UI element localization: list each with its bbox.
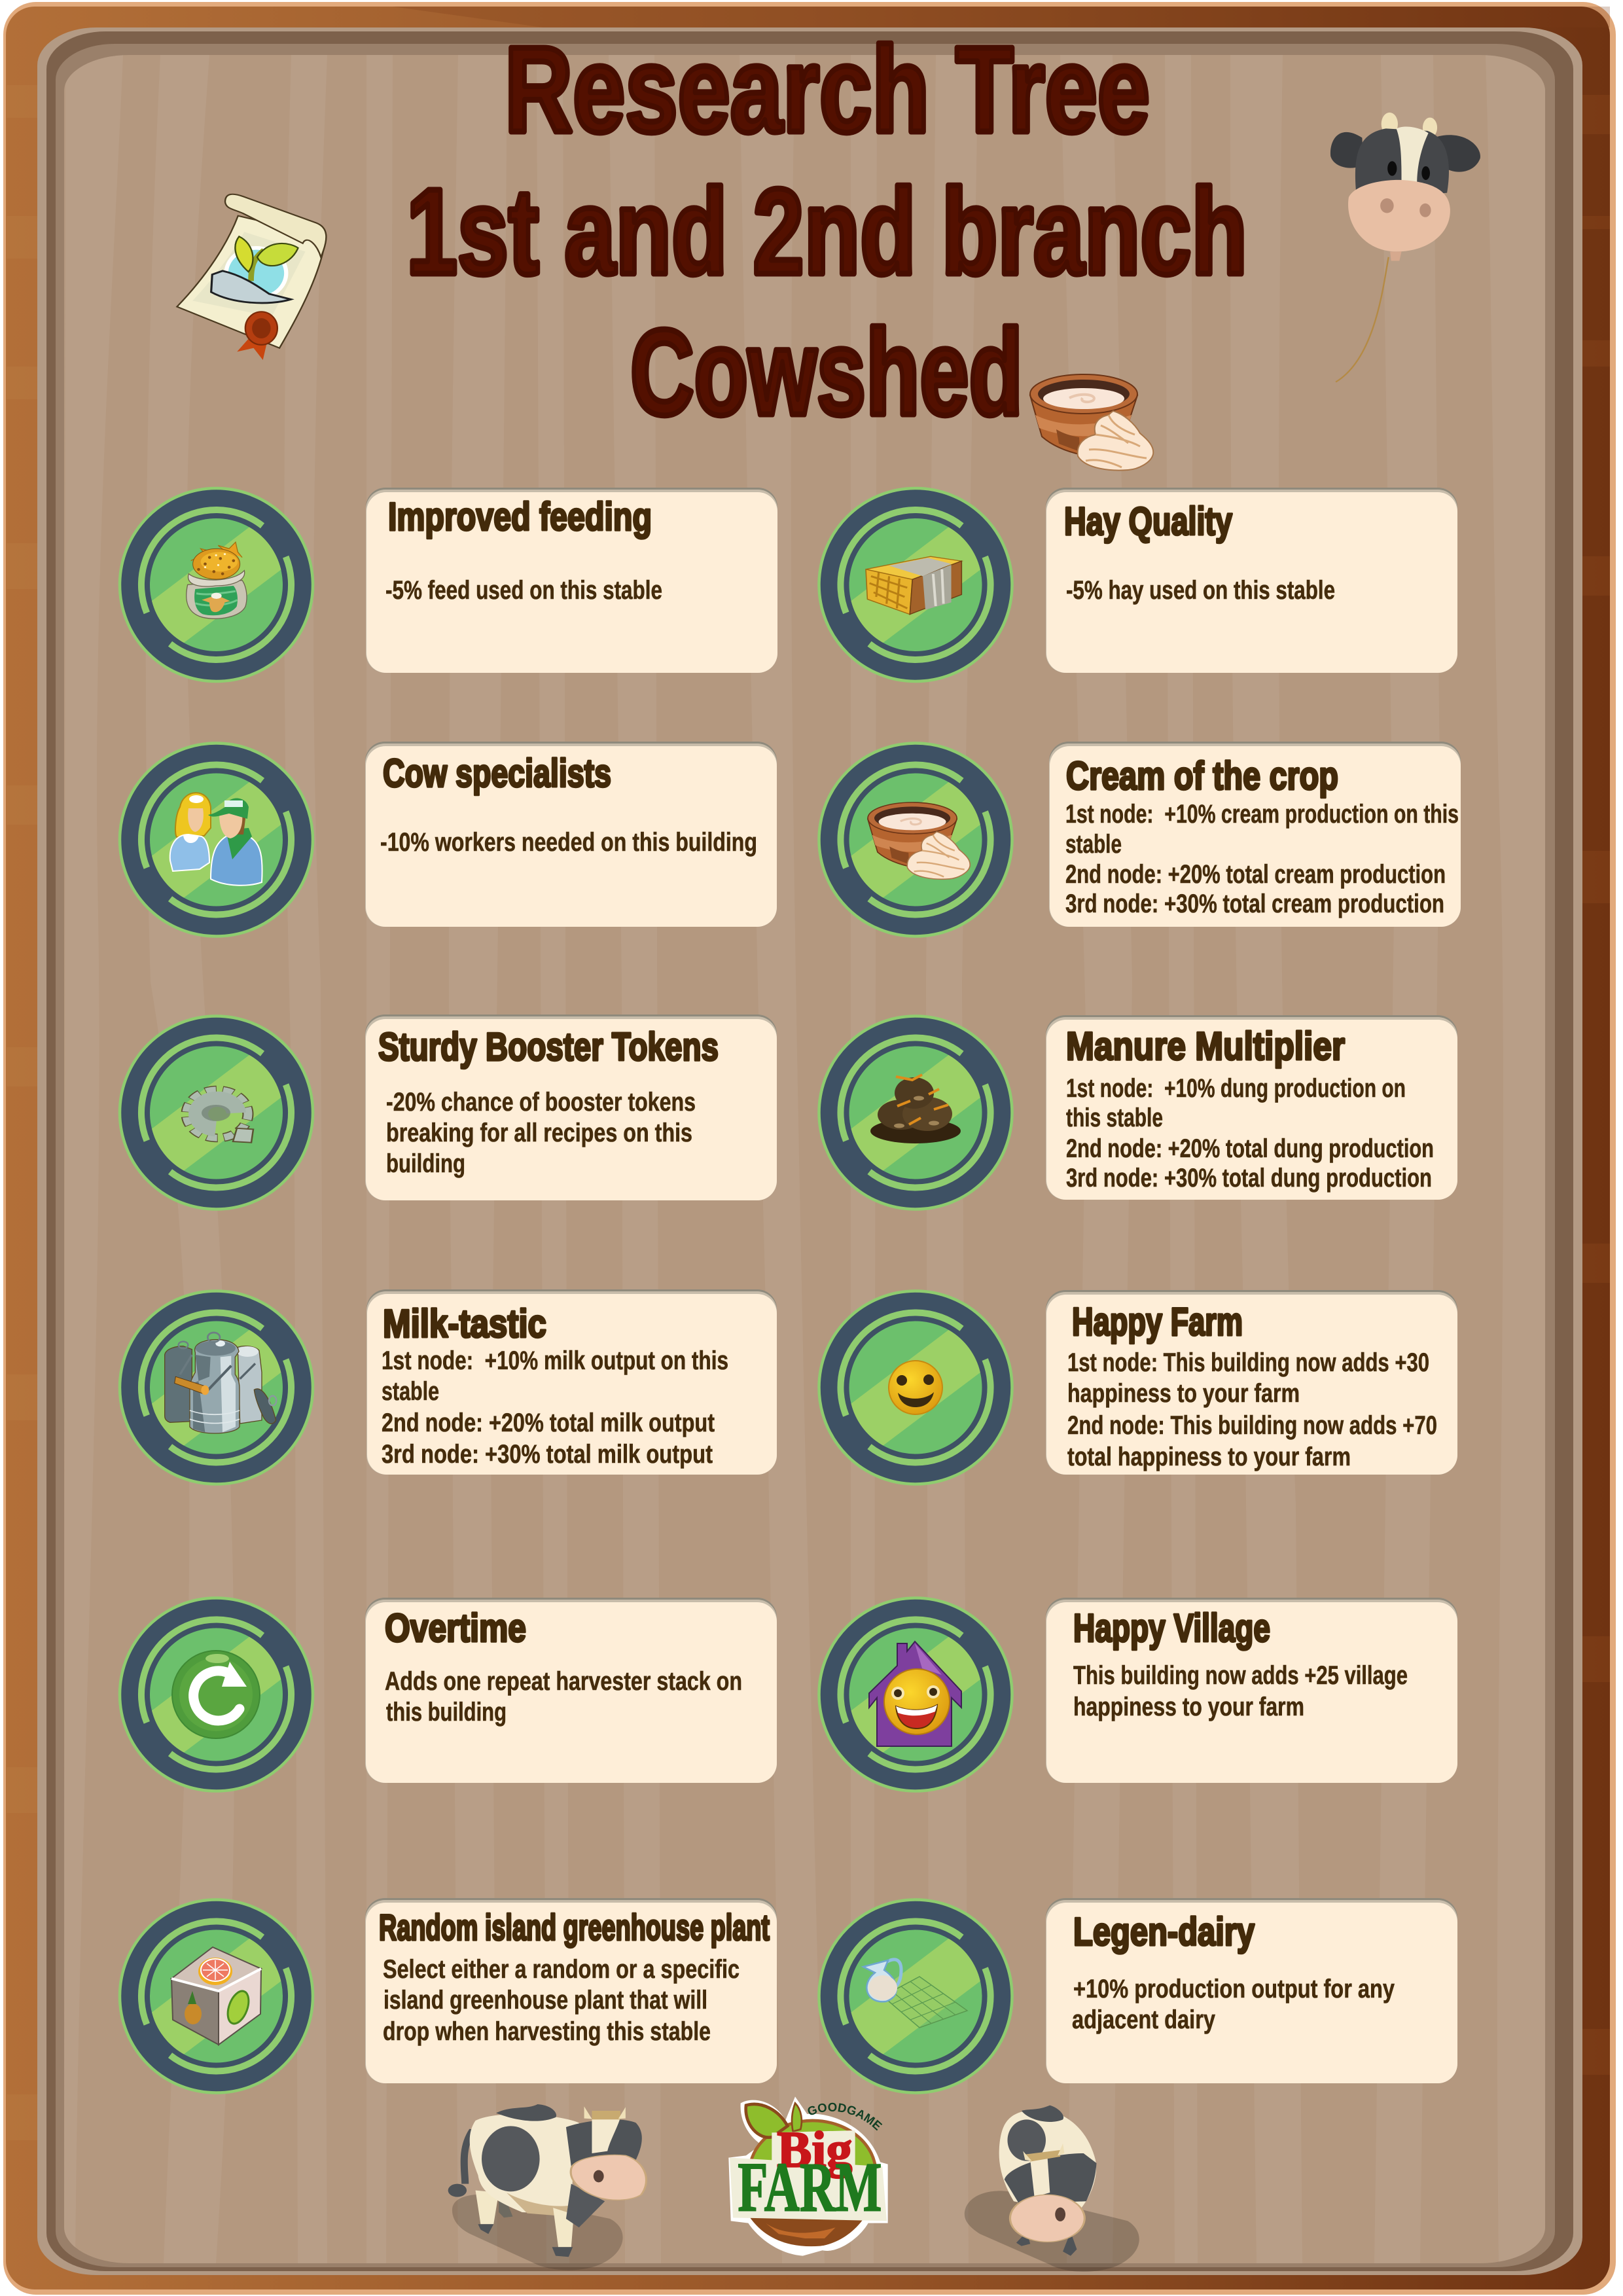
node card: Hay Quality: -5% hay used on this stable: [1066, 576, 1335, 605]
node card: Cow specialists: [365, 742, 777, 927]
node card: Cream of the crop: stable: [1065, 830, 1122, 859]
node card: Manure Multiplier: 3rd node: +30% total dung production: [1066, 1164, 1432, 1193]
node card: Cream of the crop: 1st node: +10% cream production on this: [1065, 800, 1459, 829]
node icon: Manure Multiplier: [819, 1016, 1012, 1210]
node card: Random island greenhouse plant: Random island greenhouse plant: [379, 1907, 770, 1948]
node card: Improved feeding: -5% feed used on this stable: [385, 576, 662, 605]
node icon: Overtime: [120, 1598, 313, 1791]
illustration: Big Farm logo: Big: [777, 2121, 852, 2178]
node card: Random island greenhouse plant: Select either a random or a specific: [383, 1955, 740, 1984]
node card: Happy Farm: total happiness to your farm: [1067, 1443, 1351, 1471]
node card: Legen-dairy: +10% production output for any: [1073, 1975, 1395, 2003]
node card: Happy Village: happiness to your farm: [1073, 1693, 1304, 1721]
node card: Manure Multiplier: this stable: [1066, 1103, 1163, 1132]
title: 1st and 2nd branch: [406, 164, 1247, 300]
node card: Legen-dairy: Legen-dairy: [1073, 1910, 1255, 1954]
node card: Cream of the crop: [1049, 742, 1461, 927]
node card: Improved feeding: Improved feeding: [388, 495, 652, 539]
illustration: cow left: [448, 2104, 646, 2270]
node card: Sturdy Booster Tokens: building: [386, 1149, 465, 1178]
illustration: Big Farm logo: FARM: [738, 2149, 882, 2226]
node card: Cow specialists: -10% workers needed on this building: [380, 828, 757, 857]
node card: Manure Multiplier: 1st node: +10% dung production on: [1066, 1074, 1406, 1103]
node card: Happy Village: [1046, 1598, 1457, 1783]
node card: Happy Farm: Happy Farm: [1072, 1300, 1243, 1344]
node card: Happy Farm: 2nd node: This building now adds +70: [1067, 1411, 1437, 1440]
node card: Legen-dairy: [1046, 1898, 1457, 2083]
node card: Sturdy Booster Tokens: breaking for all recipes on this: [386, 1119, 692, 1147]
node card: Milk-tastic: 2nd node: +20% total milk output: [382, 1408, 715, 1437]
node card: Overtime: [365, 1598, 777, 1783]
node icon: Sturdy Booster Tokens: [120, 1016, 313, 1210]
node card: Cow specialists: Cow specialists: [383, 751, 611, 795]
node card: Sturdy Booster Tokens: -20% chance of booster tokens: [386, 1088, 696, 1117]
node card: Milk-tastic: 1st node: +10% milk output on this: [382, 1346, 728, 1375]
node card: Milk-tastic: 3rd node: +30% total milk output: [382, 1440, 713, 1469]
node icon: Cow specialists: [120, 744, 313, 936]
node icon: Happy Farm: [819, 1291, 1012, 1484]
node card: Manure Multiplier: Manure Multiplier: [1066, 1024, 1345, 1068]
node card: Hay Quality: [1046, 488, 1457, 673]
illustration: cow right: [965, 2106, 1139, 2272]
node card: Happy Farm: [1046, 1290, 1457, 1475]
icon: cream bowl: [1030, 374, 1153, 471]
node icon: Cream of the crop: [819, 744, 1012, 936]
title: [406, 22, 1247, 440]
node card: Overtime: Overtime: [385, 1606, 526, 1650]
illustration: Big Farm logo: GOODGAME: [808, 2102, 882, 2131]
icon: cow balloon: [1330, 113, 1480, 382]
node card: Overtime: Adds one repeat harvester stack on: [385, 1667, 742, 1696]
node card: Happy Farm: happiness to your farm: [1067, 1379, 1300, 1408]
node card: Cream of the crop: Cream of the crop: [1066, 754, 1338, 798]
node card: Overtime: this building: [386, 1698, 507, 1727]
node card: Manure Multiplier: [1046, 1015, 1457, 1200]
node icon: Improved feeding: [120, 488, 313, 681]
node card: Cream of the crop: 2nd node: +20% total cream production: [1065, 860, 1446, 889]
node card: Happy Farm: 1st node: This building now adds +30: [1067, 1348, 1429, 1377]
node card: Sturdy Booster Tokens: [365, 1014, 777, 1200]
node card: Milk-tastic: [366, 1289, 777, 1475]
title: Research Tree: [505, 22, 1150, 158]
node card: Random island greenhouse plant: [365, 1898, 777, 2083]
node icon: Legen-dairy: [819, 1899, 1012, 2093]
title: Cowshed: [630, 305, 1023, 440]
node icon: Hay Quality: [819, 488, 1012, 681]
node icon: Milk-tastic: [120, 1291, 313, 1484]
node card: Happy Village: Happy Village: [1073, 1606, 1270, 1650]
node card: Random island greenhouse plant: island greenhouse plant that will: [383, 1986, 707, 2015]
node icon: Happy Village: [819, 1598, 1012, 1791]
node card: Hay Quality: Hay Quality: [1064, 499, 1232, 543]
node card: Milk-tastic: Milk-tastic: [383, 1302, 546, 1346]
node card: Improved feeding: [366, 488, 777, 673]
node card: Legen-dairy: adjacent dairy: [1072, 2005, 1216, 2034]
node card: Milk-tastic: stable: [382, 1377, 439, 1406]
node icon: Random island greenhouse plant: [120, 1899, 313, 2093]
node card: Manure Multiplier: 2nd node: +20% total dung production: [1066, 1134, 1434, 1163]
illustration: Big Farm logo: [728, 2097, 888, 2256]
node card: Happy Village: This building now adds +25 village: [1073, 1661, 1408, 1690]
icon: research scroll: [177, 194, 326, 360]
node card: Sturdy Booster Tokens: Sturdy Booster Tokens: [378, 1025, 719, 1069]
node card: Cream of the crop: 3rd node: +30% total cream production: [1065, 889, 1444, 918]
node card: Random island greenhouse plant: drop when harvesting this stable: [383, 2017, 711, 2046]
